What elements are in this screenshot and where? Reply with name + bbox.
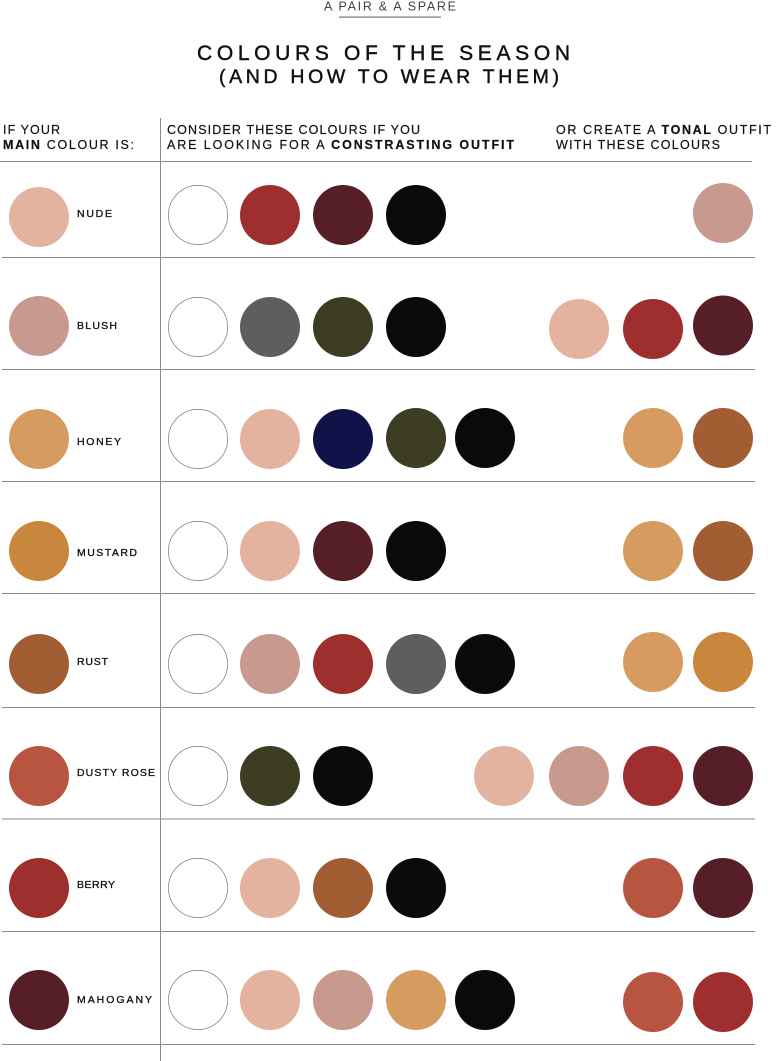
row: mustard — [9, 521, 753, 581]
row: nude — [9, 183, 753, 247]
column heading: main colour — [3, 123, 134, 152]
column heading: tonal outfit: WITH THESE COLOURS — [556, 138, 720, 152]
column heading: main colour: MAIN COLOUR IS: — [3, 138, 134, 152]
row: mahogany — [9, 970, 753, 1032]
row: blush: BLUSH — [77, 320, 117, 332]
column heading: contrasting outfit: ARE LOOKING FOR A CONSTRASTING OUTFIT — [167, 138, 514, 152]
row: dusty rose: DUSTY ROSE — [77, 767, 155, 779]
row: mahogany: MAHOGANY — [77, 994, 152, 1006]
row: berry: BERRY — [77, 879, 115, 891]
row: honey — [9, 408, 753, 469]
row: mustard: MUSTARD — [77, 547, 137, 559]
row: rust: RUST — [77, 656, 109, 668]
title: (AND HOW TO WEAR THEM) — [219, 66, 559, 88]
row: berry — [9, 858, 753, 918]
column heading: contrasting outfit: CONSIDER THESE COLOURS IF YOU — [167, 123, 420, 137]
row: rust — [9, 632, 753, 694]
row: blush — [9, 296, 753, 359]
row: nude: NUDE — [77, 208, 112, 220]
title — [197, 42, 570, 88]
column heading: contrasting outfit — [167, 123, 514, 152]
row: dusty rose — [9, 746, 753, 806]
column heading: tonal outfit: OR CREATE A TONAL OUTFIT — [556, 123, 771, 137]
column heading: tonal outfit — [556, 123, 771, 152]
row: honey: HONEY — [77, 436, 121, 448]
title: COLOURS OF THE SEASON — [197, 42, 570, 65]
column heading: main colour: IF YOUR — [3, 123, 60, 137]
